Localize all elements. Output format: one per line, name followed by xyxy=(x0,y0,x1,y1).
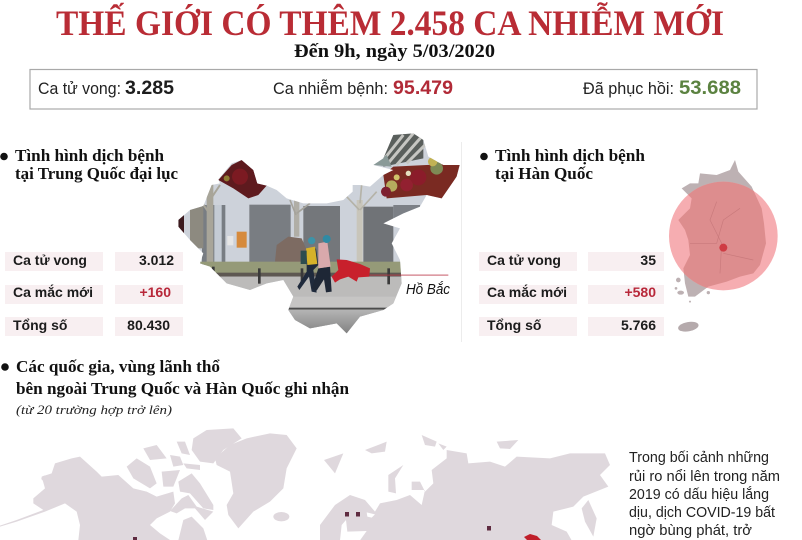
heading: South Korea: Tình hình dịch bệnh xyxy=(495,146,646,165)
panel: global stats: 3.285 xyxy=(125,78,174,99)
panel: global stats: Ca tử vong: xyxy=(38,79,121,98)
table: South Korea figures: 35 xyxy=(640,252,656,268)
table: South Korea figures: Tổng số xyxy=(487,317,542,333)
label: Hubei: Hồ Bắc xyxy=(406,281,450,298)
heading: China xyxy=(0,146,178,183)
table: China figures: Ca tử vong xyxy=(13,252,87,268)
text block: context: ngờ bùng phát, trở xyxy=(629,523,752,539)
panel: global stats: Ca nhiễm bệnh: xyxy=(273,79,388,98)
text block: context: 2019 có dấu hiệu lắng xyxy=(629,486,769,503)
table: China figures: Ca mắc mới xyxy=(13,283,93,300)
table: South Korea figures: +580 xyxy=(624,284,656,300)
heading: South Korea xyxy=(480,146,646,183)
table: South Korea figures: 5.766 xyxy=(621,317,656,333)
text block: context: Trong bối cảnh những xyxy=(629,450,769,466)
heading: other countries: (từ 20 trường hợp trở lên) xyxy=(16,402,172,417)
panel: global stats: 95.479 xyxy=(393,78,453,99)
text block: context: dịu, dịch COVID-19 bất xyxy=(629,505,775,521)
text block: context xyxy=(629,450,780,539)
table: China figures: Tổng số xyxy=(13,317,68,333)
table: South Korea figures: Ca tử vong xyxy=(487,252,561,268)
title: THẾ GIỚI CÓ THÊM 2.458 CA NHIỄM MỚI xyxy=(56,2,724,43)
map: China photo collage xyxy=(178,134,460,334)
heading: China: tại Trung Quốc đại lục xyxy=(15,164,178,183)
panel: global stats: 53.688 xyxy=(679,78,741,99)
table: China figures: 80.430 xyxy=(127,317,170,333)
people xyxy=(297,235,332,293)
table: China figures: +160 xyxy=(139,284,171,300)
map: world xyxy=(0,428,610,540)
table: China figures xyxy=(5,252,183,336)
heading: other countries: Các quốc gia, vùng lãnh thổ xyxy=(16,357,220,376)
panel: global stats xyxy=(30,70,757,109)
heading: other countries xyxy=(1,357,350,417)
heading: other countries: bên ngoài Trung Quốc và Hàn Quốc ghi nhận xyxy=(16,379,350,398)
subtitle: date: Đến 9h, ngày 5/03/2020 xyxy=(294,41,495,62)
divider xyxy=(461,142,462,342)
map: South Korea xyxy=(669,160,778,333)
heading: South Korea: tại Hàn Quốc xyxy=(495,164,593,183)
panel: global stats: Đã phục hồi: xyxy=(583,79,674,98)
heading: China: Tình hình dịch bệnh xyxy=(15,146,165,165)
text block: context: rủi ro nổi lên trong năm xyxy=(629,469,780,485)
table: China figures: 3.012 xyxy=(139,252,174,268)
Hubei province xyxy=(332,259,370,283)
map markers xyxy=(133,512,541,540)
table: South Korea figures xyxy=(479,252,664,336)
table: South Korea figures: Ca mắc mới xyxy=(487,283,567,300)
